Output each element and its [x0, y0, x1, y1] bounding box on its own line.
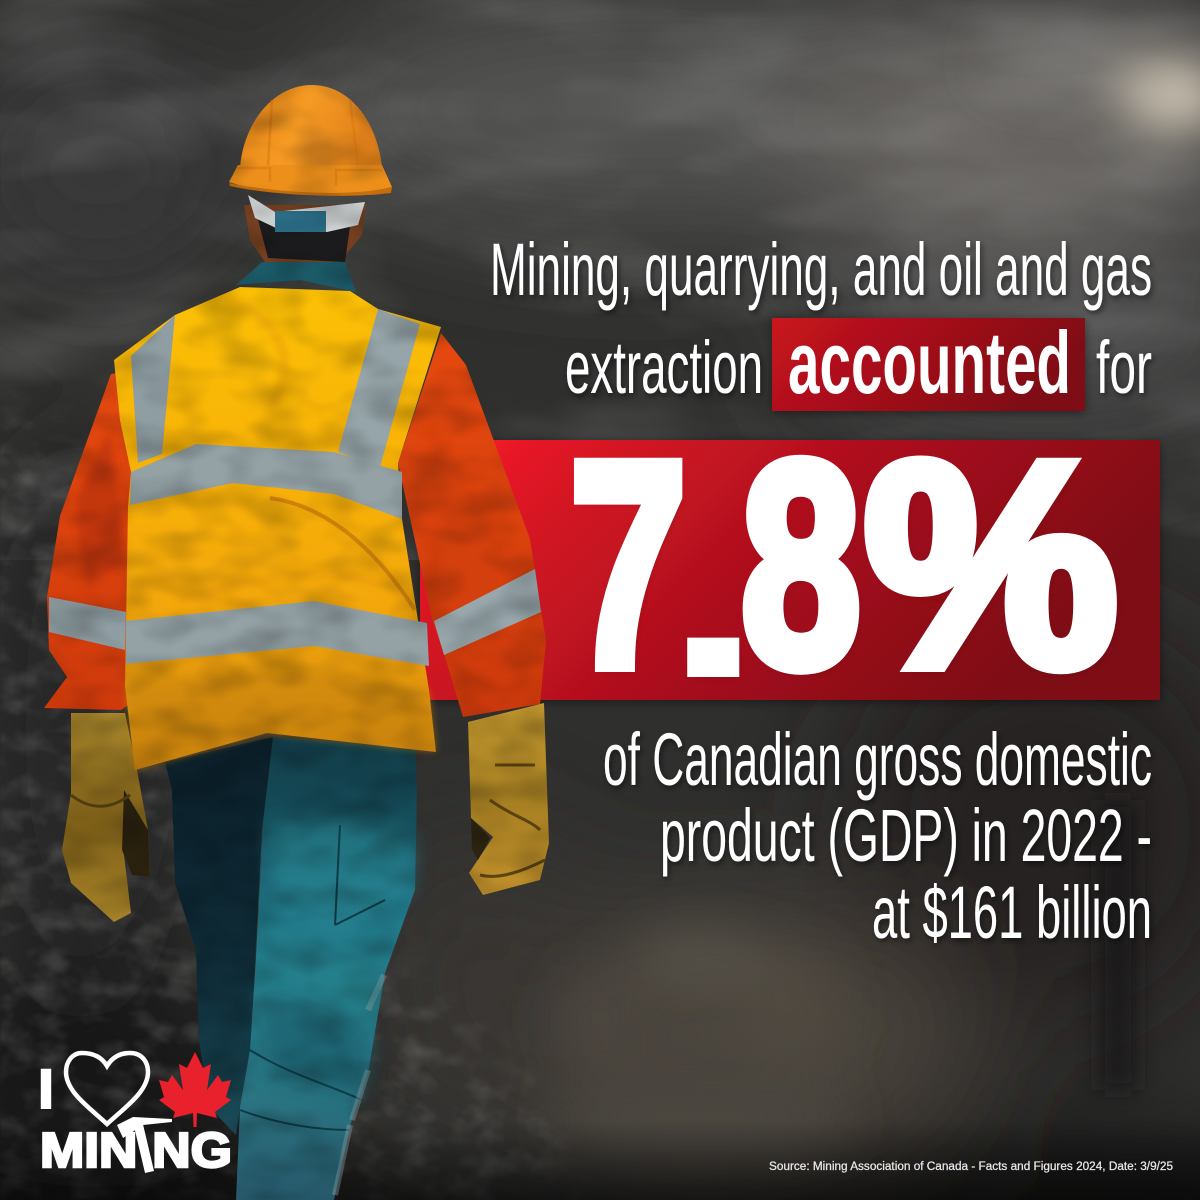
big number: 7 [570, 402, 687, 727]
headline text [490, 228, 1152, 409]
word: extraction: extraction [565, 326, 763, 409]
big number: . [681, 517, 746, 707]
vest lower horizontal stripe [126, 601, 429, 666]
vest right vertical stripe [338, 309, 420, 467]
word: for: for [1096, 326, 1152, 409]
icon: maple leaf [159, 1052, 231, 1127]
headband [248, 195, 365, 232]
body text [603, 718, 1152, 954]
logo word MINING: MINING [40, 1124, 232, 1178]
icon: pickaxe [117, 1117, 172, 1173]
left sleeve reflective stripe [49, 597, 126, 650]
hair [256, 212, 352, 262]
right sleeve reflective stripe [434, 569, 541, 655]
collar [236, 262, 356, 292]
big number: % [864, 402, 1118, 727]
vest upper horizontal stripe [130, 444, 402, 519]
trousers back leg [165, 737, 273, 1135]
trousers front leg [236, 737, 417, 1200]
vest left vertical stripe [131, 315, 175, 463]
helmet [229, 85, 392, 196]
logo: I love Canada mining [36, 1052, 232, 1178]
vest [114, 287, 441, 770]
figure: miner from behind [44, 85, 549, 1200]
highlight: accounted [772, 313, 1085, 412]
left sleeve [44, 370, 135, 710]
right sleeve [398, 333, 546, 717]
neck and ears [244, 205, 366, 262]
icon: heart [66, 1053, 148, 1124]
source: Source: Mining Association of Canada - Facts and Figures 2024, Date: 3/9/25 [769, 1161, 1173, 1173]
big number: 8 [741, 402, 861, 727]
left glove [62, 713, 150, 922]
panel: red highlight box for 7.8% [420, 440, 1160, 700]
logo letter I: I [36, 1057, 56, 1122]
right glove [468, 703, 549, 895]
